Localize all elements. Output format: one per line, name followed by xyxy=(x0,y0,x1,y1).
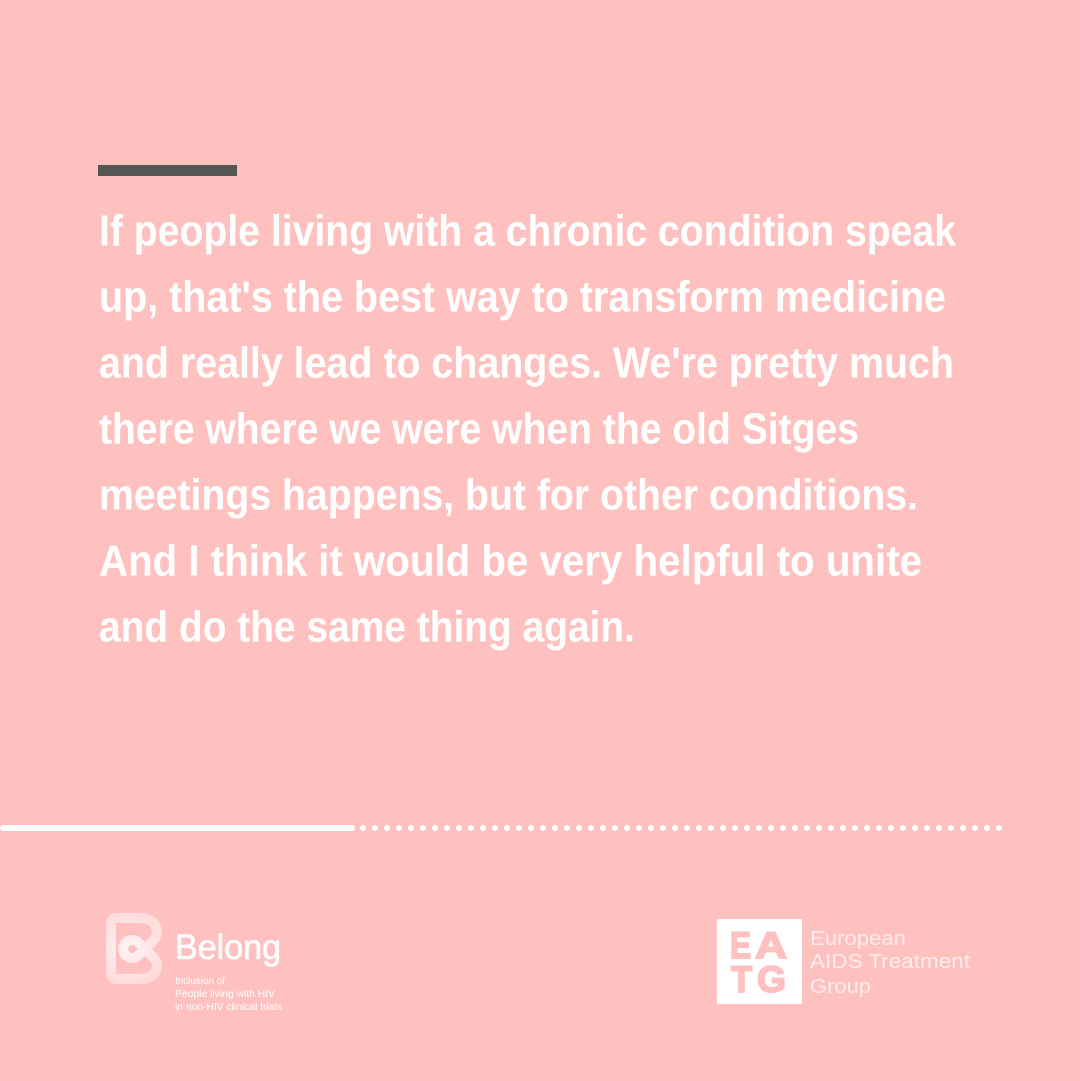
badge letters: A xyxy=(755,925,787,966)
progress divider xyxy=(0,825,1000,831)
badge square xyxy=(717,919,802,1004)
badge letters: T xyxy=(731,959,752,1000)
tagline: People living with HIV xyxy=(175,989,275,1000)
quote text: meetings happens, but for other conditions. xyxy=(99,470,918,520)
badge letters: G xyxy=(757,959,786,1000)
wordmark: Belong xyxy=(175,928,281,967)
accent bar xyxy=(98,165,237,176)
quote text: And I think it would be very helpful to unite xyxy=(99,536,922,586)
badge letters: E xyxy=(730,925,751,966)
badge letters xyxy=(730,925,787,1000)
tagline: Inclusion of xyxy=(175,976,225,987)
organisation name: Group xyxy=(810,976,871,998)
quote text: there where we were when the old Sitges xyxy=(99,404,859,454)
quote text: and do the same thing again. xyxy=(99,602,635,652)
logo: Belong xyxy=(111,918,282,1013)
organisation name: European xyxy=(810,928,906,950)
organisation name: AIDS Treatment xyxy=(810,951,970,973)
quote text: and really lead to changes. We're pretty much xyxy=(99,338,954,388)
tagline: in non-HIV clinical trials xyxy=(175,1002,282,1013)
organisation name xyxy=(810,928,970,998)
quote text xyxy=(99,206,956,652)
tagline xyxy=(175,976,282,1013)
logo: EATG xyxy=(717,919,970,1004)
quote text: up, that's the best way to transform medicine xyxy=(99,272,946,322)
quote text: If people living with a chronic condition speak xyxy=(99,206,956,256)
icon: Belong mark xyxy=(111,918,157,979)
